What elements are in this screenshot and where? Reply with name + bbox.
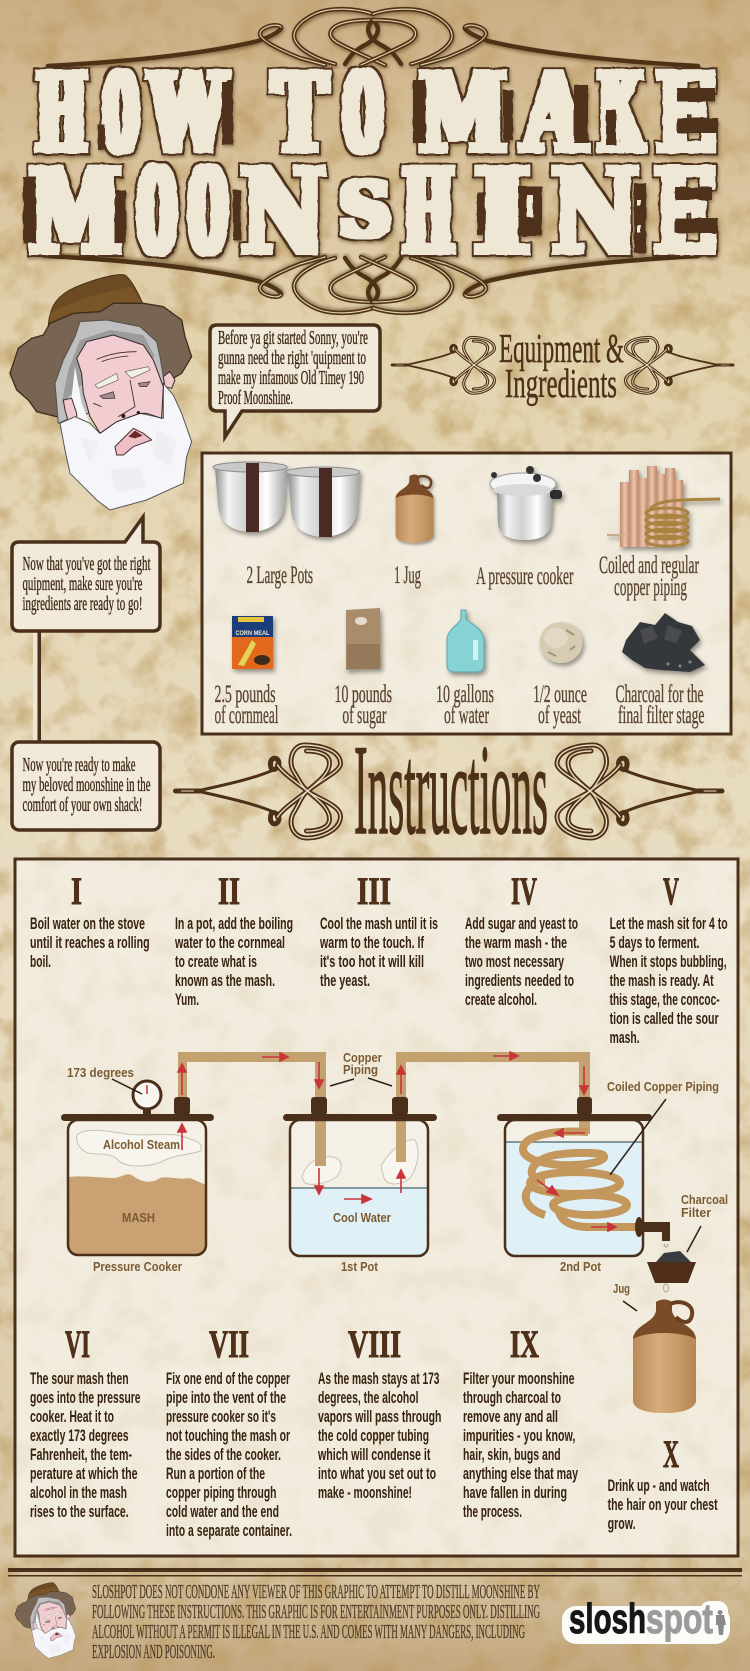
panel: equipment and ingredients [202, 453, 731, 734]
label: water: 10 gallons [436, 681, 494, 708]
heading: equipment and ingredients: Ingredients [505, 360, 617, 406]
step 8: which will condense it [317, 1446, 431, 1464]
label: jug: Jug [613, 1281, 630, 1296]
step 7: pipe into the vent of the [166, 1389, 286, 1407]
label: water [436, 681, 494, 729]
title: T [273, 49, 327, 177]
title: N [241, 142, 325, 280]
step 6: goes into the pressure [30, 1389, 140, 1407]
step 3 [319, 870, 438, 990]
title: E [655, 142, 715, 280]
title: M [30, 142, 121, 280]
label: sugar [334, 681, 392, 729]
label: cornmeal [214, 681, 279, 729]
ornament: instructions left [176, 745, 341, 838]
footer divider [8, 1568, 742, 1576]
label: copper piping: copper piping [614, 574, 687, 601]
diagram: spout [635, 1217, 670, 1247]
step 8: vapors will pass through [318, 1408, 441, 1426]
logo: sloshspot: spot [646, 1595, 713, 1642]
panel: instructions [15, 859, 738, 1556]
title: H [37, 49, 86, 177]
label: charcoal filter [681, 1192, 728, 1220]
step 2 [174, 870, 293, 1009]
step 6 [30, 1323, 140, 1521]
label: 2 large pots: 2 Large Pots [246, 562, 313, 589]
step 5: V [663, 870, 679, 913]
step 1: I [71, 870, 82, 913]
title: M [420, 49, 506, 177]
speech bubble: before ya git started: make my infamous Old Timey 190 [218, 367, 364, 389]
step 4: Add sugar and yeast to [465, 915, 578, 933]
speech bubble: before ya git started: Proof Moonshine. [218, 387, 293, 409]
label: charcoal filter: Charcoal [681, 1192, 728, 1207]
label: sugar: of sugar [342, 702, 387, 729]
label: charcoal filter: Filter [681, 1205, 711, 1220]
step 6: The sour mash then [30, 1370, 129, 1388]
step 7: copper piping through [166, 1484, 276, 1502]
step 1 [30, 870, 150, 971]
diagram: flow arrows [178, 1052, 616, 1231]
step 4: two most necessary [465, 953, 565, 971]
step 5: 5 days to ferment. [610, 934, 700, 952]
step 6: alcohol in the mash [30, 1484, 127, 1502]
title: E [657, 49, 715, 177]
diagram: copper pipes [178, 1052, 590, 1166]
title: K [599, 49, 643, 177]
speech bubble: right quipment: quipment, make sure you're [22, 573, 143, 595]
step 2: to create what is [175, 953, 257, 971]
step 9: anything else that may [463, 1465, 579, 1483]
label: copper piping [330, 1050, 392, 1086]
step 7: into a separate container. [166, 1522, 292, 1540]
step 1: until it reaches a rolling [30, 934, 150, 952]
diagram: temperature gauge [67, 1065, 161, 1115]
label: cornmeal: 2.5 pounds [214, 681, 276, 708]
diagram: first pot: Cool Water [333, 1210, 391, 1225]
speech bubble: before ya git started [210, 325, 380, 437]
step 4: IV [511, 870, 537, 913]
diagram: first pot [283, 1097, 437, 1256]
label: yeast [533, 681, 587, 729]
speech bubble: ready to make: Now you're ready to make [22, 754, 136, 776]
step 7 [166, 1323, 292, 1540]
diagram: pressure cooker: MASH [122, 1210, 155, 1225]
step 5 [610, 870, 728, 1047]
diagram: pressure cooker [61, 1097, 214, 1255]
disclaimer text: EXPLOSION AND POISONING. [92, 1641, 215, 1663]
step 6: cooker. Heat it to [30, 1408, 114, 1426]
step 1: Boil water on the stove [30, 915, 145, 933]
diagram: charcoal filter [647, 1226, 701, 1292]
step 9: the process. [463, 1503, 522, 1521]
diagram: jug [633, 1300, 696, 1413]
icon: jug [396, 474, 433, 543]
speech bubble: before ya git started: Before ya git started Sonny, you're [218, 327, 368, 349]
step 4: create alcohol. [465, 991, 537, 1009]
step 7: Fix one end of the copper [166, 1370, 290, 1388]
step 1: boil. [30, 953, 51, 971]
speech bubble: right quipment: Now that you've got the right [22, 553, 151, 575]
step 3: III [357, 870, 391, 913]
icon: yeast [540, 622, 582, 663]
ornament: equipment right [626, 337, 733, 393]
ornament: equipment left [392, 337, 494, 393]
label: pressure cooker: Pressure Cooker [93, 1259, 182, 1274]
step 3: the yeast. [320, 972, 370, 990]
label: sugar: 10 pounds [334, 681, 392, 708]
label: copper piping: Copper [343, 1050, 382, 1065]
label: 2nd pot: 2nd Pot [560, 1259, 602, 1274]
speech bubble: ready to make: my beloved moonshine in the [22, 774, 151, 796]
step 3: warm to the touch. If [319, 934, 424, 952]
icon: large pots [213, 462, 360, 537]
step 7: not touching the mash or [166, 1427, 290, 1445]
step 6: rises to the surface. [30, 1503, 129, 1521]
speech bubble: ready to make [12, 742, 160, 830]
icon: small old man [15, 1583, 76, 1658]
title: H [404, 142, 453, 280]
step 9: remove any and all [463, 1408, 558, 1426]
diagram: second pot with coil [497, 1097, 666, 1256]
character: old man [10, 275, 192, 510]
step 7: VII [209, 1323, 249, 1366]
step 5: mash. [610, 1029, 640, 1047]
step 10: X [663, 1433, 679, 1476]
label: copper piping [599, 552, 699, 601]
step 8 [317, 1323, 441, 1502]
icon: copper piping [607, 466, 720, 547]
step 3: it's too hot it will kill [320, 953, 424, 971]
step 9: hair, skin, bugs and [463, 1446, 561, 1464]
title: S [340, 166, 390, 254]
speech bubble: before ya git started: gunna need the right 'quipment to [218, 347, 366, 369]
step 6: exactly 173 degrees [30, 1427, 129, 1445]
label: 1 jug: 1 Jug [394, 562, 421, 589]
step 7: pressure cooker so it's [166, 1408, 276, 1426]
disclaimer text [92, 1581, 540, 1663]
diagram: temperature gauge: 173 degrees [67, 1065, 134, 1080]
step 9: through charcoal to [463, 1389, 561, 1407]
step 10 [608, 1433, 718, 1533]
title [23, 49, 718, 280]
title flourish top [48, 9, 698, 66]
step 4: the warm mash - the [465, 934, 567, 952]
step 8: the cold copper tubing [318, 1427, 429, 1445]
step 4 [465, 870, 578, 1009]
step 6: Fahrenheit, the tem- [30, 1446, 132, 1464]
step 3: Cool the mash until it is [320, 915, 438, 933]
step 6: perature at which the [30, 1465, 138, 1483]
label: 1st pot: 1st Pot [341, 1259, 379, 1274]
step 9: impurities - you know, [463, 1427, 575, 1445]
step 2: water to the cornmeal [174, 934, 285, 952]
step 10: grow. [608, 1515, 636, 1533]
step 8: As the mash stays at 173 [318, 1370, 440, 1388]
icon: sugar bag [346, 608, 381, 670]
heading: equipment and ingredients [499, 325, 624, 406]
icon: cornmeal box: CORN MEAL [236, 631, 270, 637]
step 9: IX [510, 1323, 539, 1366]
speech bubble: right quipment: ingredients are ready to go! [22, 593, 142, 615]
step 8: VIII [348, 1323, 401, 1366]
heading: equipment and ingredients: Equipment & [499, 325, 624, 371]
label: coiled copper piping: Coiled Copper Piping [607, 1079, 719, 1094]
title: O [190, 142, 226, 280]
title: O [105, 49, 137, 177]
step 8: degrees, the alcohol [318, 1389, 418, 1407]
icon: water bottle [447, 610, 484, 672]
title flourish bottom [48, 256, 698, 313]
title: O [345, 49, 381, 177]
speech bubble: right quipment [12, 517, 160, 631]
logo: sloshspot: slosh [569, 1595, 646, 1642]
step 9: Filter your moonshine [463, 1370, 574, 1388]
step 9: have fallen in during [463, 1484, 567, 1502]
connector stem between bubbles [33, 628, 41, 744]
step 2: Yum. [175, 991, 199, 1009]
speech bubble: ready to make: comfort of your own shack! [22, 794, 142, 816]
step 7: cold water and the end [166, 1503, 279, 1521]
title: A [522, 49, 586, 177]
step 2: II [218, 870, 240, 913]
diagram: jug pointer [623, 1301, 637, 1311]
title: N [552, 142, 638, 280]
step 2: In a pot, add the boiling [175, 915, 293, 933]
icon: cornmeal box [232, 616, 273, 669]
step 4: ingredients needed to [465, 972, 574, 990]
title: O [139, 142, 175, 280]
ornament: instructions right [557, 745, 722, 838]
label: yeast: of yeast [538, 702, 581, 729]
title: W [149, 49, 227, 177]
label: water: of water [444, 702, 489, 729]
step 6: VI [65, 1323, 90, 1366]
icon: pressure cooker [490, 466, 562, 540]
step 2: known as the mash. [175, 972, 275, 990]
label: copper piping: Piping [343, 1062, 378, 1077]
label: charcoal [616, 681, 704, 729]
label: pressure cooker: A pressure cooker [476, 563, 574, 590]
diagram: pressure cooker: Alcohol Steam [103, 1137, 180, 1152]
title: I [473, 142, 531, 280]
icon: charcoal [622, 613, 705, 672]
logo: sloshspot [562, 1595, 730, 1644]
step 7: the sides of the cooker. [166, 1446, 281, 1464]
label: cornmeal: of cornmeal [214, 702, 279, 729]
step 8: into what you set out to [318, 1465, 436, 1483]
step 8: make - moonshine! [318, 1484, 412, 1502]
step 7: Run a portion of the [166, 1465, 265, 1483]
label: yeast: 1/2 ounce [533, 681, 587, 708]
step 9 [463, 1323, 579, 1521]
